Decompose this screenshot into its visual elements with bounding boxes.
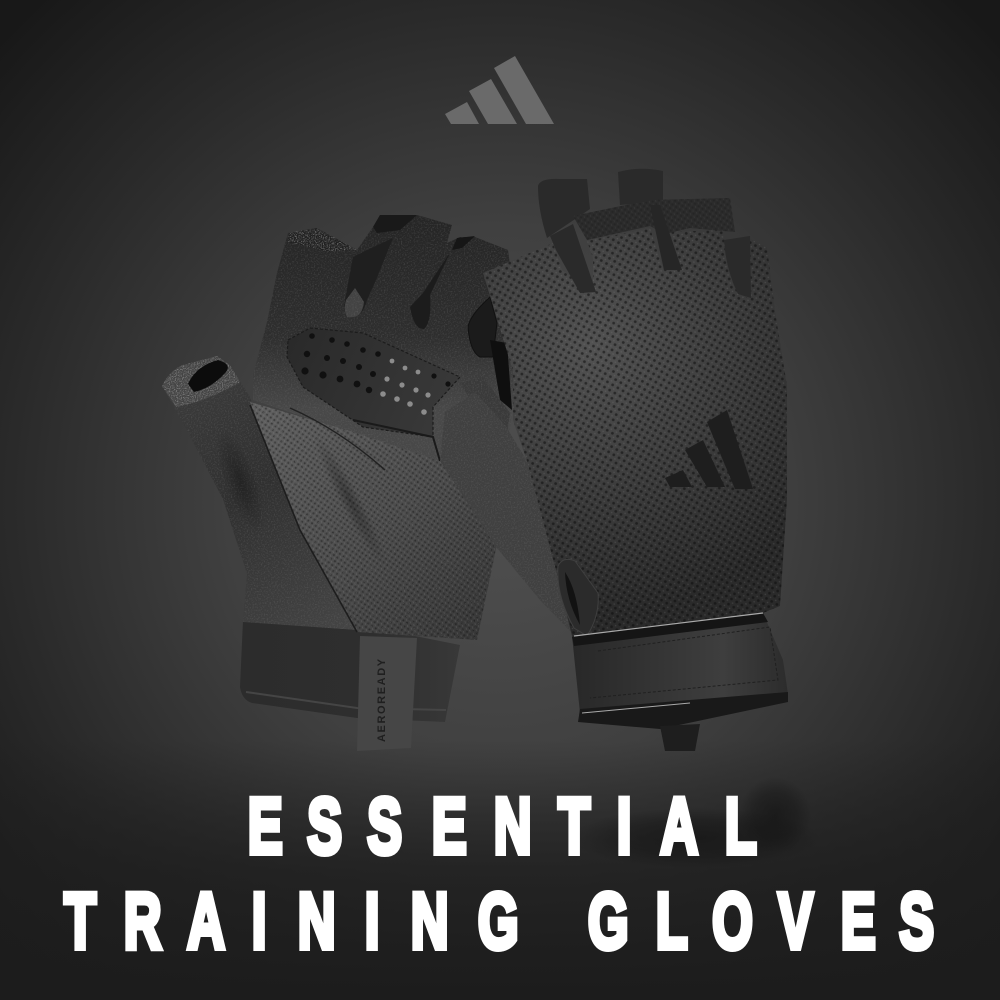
finger 3 knit opening <box>452 236 475 250</box>
bottom tab <box>660 724 700 751</box>
cuff <box>240 620 460 722</box>
finger 1 knit opening <box>288 228 357 252</box>
upper palm with fingers <box>253 215 520 462</box>
aeroready tab: AEROREADY <box>376 657 388 742</box>
glove logo <box>665 410 753 489</box>
left glove: palm view <box>162 215 520 751</box>
velcro strap <box>572 613 788 729</box>
thumb <box>162 356 357 630</box>
ribbed patch <box>460 377 510 433</box>
finger gap 3 <box>468 297 497 357</box>
title <box>64 782 934 966</box>
aeroready tab <box>357 636 417 751</box>
suede bridge between gloves <box>440 392 573 634</box>
finger gap 2 <box>410 253 450 329</box>
perforated palm pad <box>287 328 460 437</box>
finger stubs <box>538 169 663 238</box>
finger loops <box>550 198 751 298</box>
title line 2: TRAINING GLOVES <box>64 877 934 966</box>
finger gap 1 <box>344 238 393 317</box>
mesh palm panel <box>250 402 497 640</box>
title line 1: ESSENTIAL <box>248 782 757 871</box>
mesh back of hand <box>483 228 787 636</box>
thumb opening <box>558 559 598 636</box>
right glove: back view <box>483 169 788 751</box>
finger 2 knit opening <box>373 215 417 233</box>
brand logo <box>445 56 554 124</box>
